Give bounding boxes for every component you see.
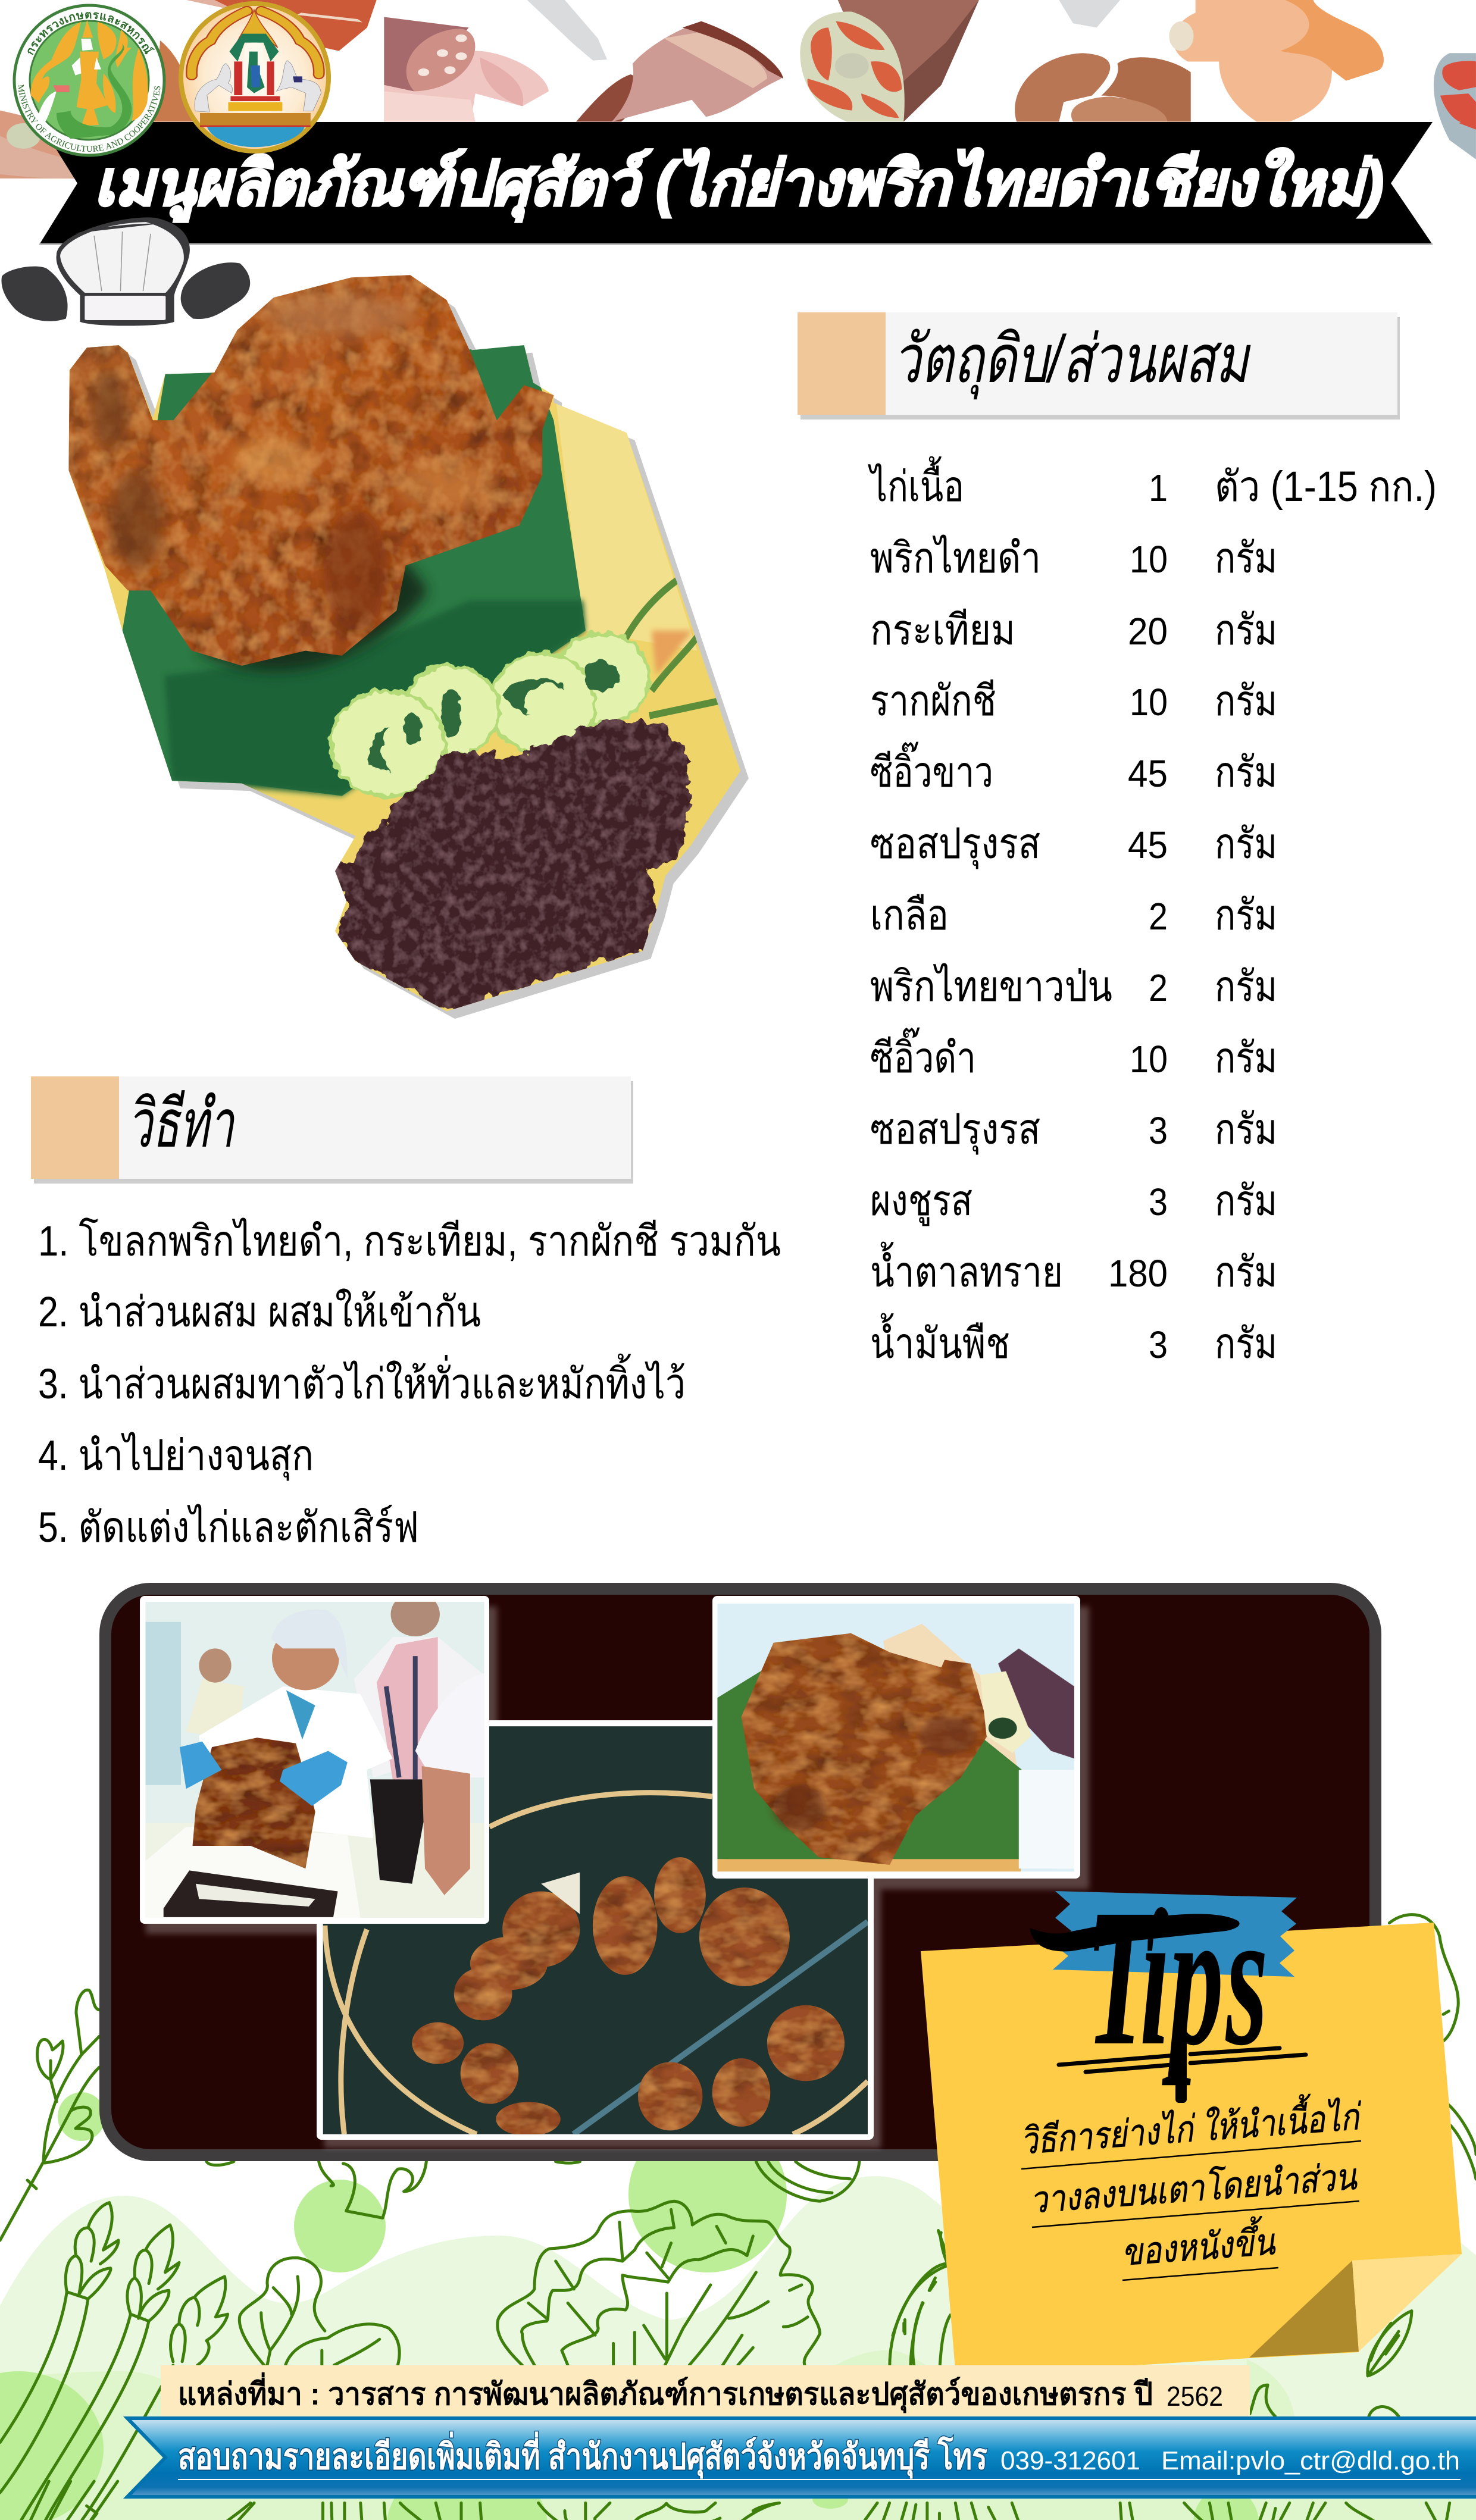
utensil silhouettes — [527, 0, 1120, 61]
cut meat at right edge — [1434, 53, 1476, 159]
row 7: เกลือ — [870, 892, 949, 939]
rotisserie photo — [317, 1720, 874, 2140]
row 13: กรัม — [1215, 1320, 1277, 1367]
row 13 — [870, 1313, 1277, 1367]
row 5: 45 — [1128, 752, 1168, 795]
row 1: ตัว (1-15 กก.) — [1215, 464, 1437, 511]
woman coat — [199, 1686, 393, 1838]
row 4: 10 — [1130, 681, 1168, 724]
section header: ingredients — [798, 312, 1400, 420]
lettuce — [335, 721, 693, 1012]
row 8: 2 — [1149, 966, 1168, 1009]
pedestal — [200, 113, 311, 126]
row 13: น้ำมันพืช — [870, 1313, 1010, 1367]
row 5: ซีอิ๊วขาว — [870, 742, 993, 796]
background: green hills and vegetables — [0, 1915, 1476, 2520]
ingredients list — [868, 456, 1437, 1367]
row 10: ซอสปรุงรส — [870, 1106, 1040, 1155]
method steps — [38, 1217, 781, 1551]
method header panel — [31, 1076, 631, 1179]
chef hat icon with steaks — [1, 217, 250, 326]
source credit bar — [161, 2365, 1250, 2419]
roast chicken on leaf photo — [712, 1596, 1080, 1879]
row 11: ผงชูรส — [870, 1178, 972, 1226]
contact ribbon — [127, 2418, 1476, 2497]
row 6: ซอสปรุงรส — [870, 821, 1040, 869]
title banner — [39, 122, 1433, 245]
title text: เมนูผลิตภัณฑ์ปศุสัตว์ (ไก่ย่างพริกไทยดำเชียงใหม่) — [94, 148, 1384, 222]
row 9 — [870, 1028, 1277, 1082]
hat — [57, 217, 190, 326]
row 4 — [870, 678, 1277, 725]
vine left — [0, 2036, 99, 2240]
row 5 — [870, 742, 1277, 796]
salami — [384, 17, 549, 122]
row 8: พริกไทยขาวป่น — [870, 962, 1112, 1010]
row 8: กรัม — [1215, 963, 1277, 1010]
row 2: 10 — [1130, 538, 1168, 581]
meat leg — [800, 0, 979, 122]
row 1: 1 — [1149, 467, 1168, 509]
source text: แหล่งที่มา : วารสาร การพัฒนาผลิตภัณฑ์การเกษตรและปศุสัตว์ของเกษตรกร ปี — [178, 2372, 1153, 2413]
note fold flap — [1352, 2254, 1462, 2352]
row 4: รากผักชี — [870, 678, 996, 725]
source year: 2562 — [1167, 2381, 1223, 2412]
row 3 — [870, 607, 1277, 654]
method header text: วิธีทำ — [127, 1087, 235, 1161]
logo flames and figure — [30, 20, 148, 139]
row 10: กรัม — [1215, 1106, 1277, 1153]
header text: วัตถุดิบ/ส่วนผสม — [893, 322, 1251, 400]
outlined plants — [0, 1915, 1476, 2520]
row 8 — [870, 962, 1277, 1010]
email: Email:pvlo_ctr@dld.go.th — [1161, 2446, 1460, 2475]
row 12: น้ำตาลทราย — [870, 1241, 1063, 1296]
row 9: กรัม — [1215, 1035, 1277, 1082]
shrine — [229, 34, 279, 61]
step 5: 5. ตัดแต่งไก่และตักเสิร์ฟ — [38, 1503, 419, 1551]
tip line 2: วางลงบนเตาโดยนำส่วน — [1028, 2156, 1359, 2221]
horses — [195, 64, 232, 112]
logo: Ministry of Agriculture and Cooperatives — [13, 4, 165, 157]
row 11: กรัม — [1215, 1178, 1277, 1225]
banner ribbon — [39, 122, 1433, 245]
right steak — [181, 262, 250, 319]
tip line 3: ของหนังขึ้น — [1119, 2215, 1277, 2274]
step 1: 1. โขลกพริกไทยดำ, กระเทียม, รากผักชี รวมกัน — [38, 1217, 781, 1265]
row 10 — [870, 1106, 1277, 1155]
chicken leg — [1169, 0, 1384, 122]
row 2: กรัม — [1215, 535, 1277, 582]
grass blades — [624, 581, 720, 716]
bitter melon rings — [330, 633, 649, 796]
sausages — [1015, 53, 1191, 122]
row 5: กรัม — [1215, 749, 1277, 796]
tips heading: Tips — [1086, 1868, 1268, 2086]
step 3: 3. นำส่วนผสมทาตัวไก่ให้ทั่วและหมักทิ้งไว้ — [38, 1353, 686, 1408]
plants under ribbon — [26, 2481, 1450, 2520]
row 4: กรัม — [1215, 678, 1277, 725]
row 3: กรัม — [1215, 607, 1277, 654]
row 6: 45 — [1128, 824, 1168, 866]
method header accent — [31, 1076, 119, 1179]
phone: 039-312601 — [1000, 2446, 1140, 2475]
row 12: กรัม — [1215, 1249, 1277, 1296]
ham — [576, 21, 783, 122]
photo shadow — [77, 283, 749, 1019]
row 7 — [870, 892, 1277, 939]
banana leaf — [123, 345, 586, 796]
photo panel — [105, 1589, 1375, 2155]
photo haze shadows — [146, 1607, 1089, 2148]
row 12 — [870, 1241, 1277, 1296]
gloves — [180, 1742, 348, 1806]
meat behind logos — [0, 0, 377, 179]
top strip: meat illustrations — [0, 0, 1476, 179]
man — [354, 1637, 484, 1777]
asparagus and leaves — [0, 2162, 952, 2520]
chicken body — [68, 275, 554, 666]
header panel — [798, 312, 1397, 415]
right person — [415, 1673, 484, 1777]
header accent — [798, 312, 886, 415]
row 6: กรัม — [1215, 821, 1277, 868]
row 13: 3 — [1149, 1323, 1168, 1366]
row 6 — [870, 821, 1277, 869]
note fold underside — [1249, 2261, 1359, 2358]
row 1: ไก่เนื้อ — [868, 456, 964, 511]
flames — [192, 11, 319, 76]
row 11: 3 — [1149, 1181, 1168, 1223]
header shadow — [800, 317, 1400, 420]
contact text: สอบถามรายละเอียดเพิ่มเติมที่ สำนักงานปศุสัตว์จังหวัดจันทบุรี โทร — [178, 2431, 987, 2479]
row 3: 20 — [1128, 610, 1168, 653]
row 2 — [870, 534, 1277, 582]
panel frame — [105, 1589, 1375, 2155]
tray — [145, 1827, 361, 1918]
roast chicken hero photo — [60, 275, 752, 1019]
tips sticky note — [921, 1868, 1462, 2377]
row 7: กรัม — [1215, 892, 1277, 939]
tip line 1: วิธีการย่างไก่ ให้นำเนื้อไก่ — [1018, 2090, 1364, 2162]
row 7: 2 — [1149, 895, 1168, 938]
left steak — [1, 267, 68, 321]
note paper — [921, 1923, 1462, 2377]
row 9: 10 — [1130, 1038, 1168, 1081]
blue tape — [1053, 1891, 1297, 1977]
green blobs — [0, 2092, 1259, 2520]
background person — [186, 1679, 244, 1739]
chicken highlights — [92, 295, 497, 631]
row 10: 3 — [1149, 1109, 1168, 1152]
wood board — [60, 350, 752, 1016]
logo: Provincial seal — [179, 1, 331, 154]
tips heading — [1030, 1868, 1306, 2103]
person photo — [140, 1592, 489, 1924]
logo ring text: กระทรวงเกษตรและสหกรณ์ — [27, 12, 155, 55]
plants at right — [893, 1915, 1476, 2416]
row 1 — [868, 456, 1437, 511]
row 11 — [870, 1178, 1277, 1226]
waters — [207, 127, 305, 147]
chicken held — [193, 1738, 315, 1868]
logo ring text english: MINISTRY OF AGRICULTURE AND COOPERATIVES — [18, 84, 161, 152]
row 9: ซีอิ๊วดำ — [870, 1028, 976, 1082]
step 4: 4. นำไปย่างจนสุก — [38, 1431, 314, 1481]
light green hills — [0, 2176, 1476, 2520]
step 2: 2. นำส่วนผสม ผสมให้เข้ากัน — [38, 1288, 481, 1336]
second hill layer — [0, 2371, 1476, 2520]
row 12: 180 — [1108, 1252, 1168, 1295]
method header shadow — [34, 1081, 633, 1184]
row 3: กระเทียม — [870, 607, 1015, 654]
row 2: พริกไทยดำ — [870, 534, 1041, 582]
section header: method — [31, 1076, 633, 1184]
